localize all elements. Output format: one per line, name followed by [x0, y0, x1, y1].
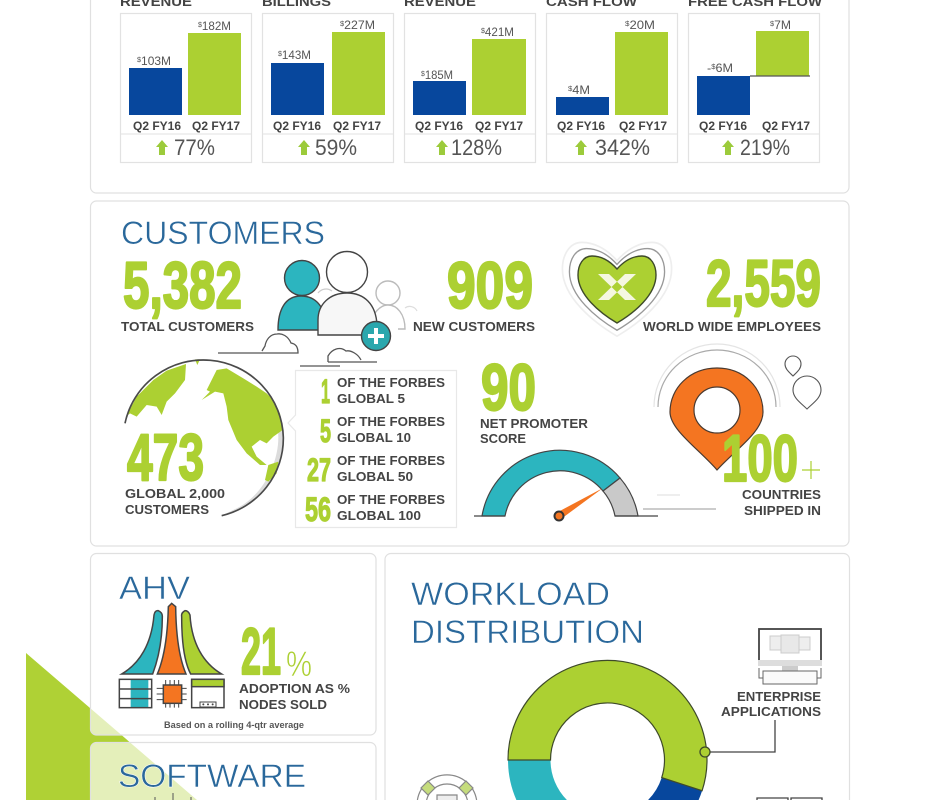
card: revenue: Q2 FY17 [192, 121, 240, 133]
heading: ahv: AHV [119, 570, 191, 606]
icon: monitor and server [758, 629, 822, 684]
note: rolling average: Based on a rolling 4-qtr average [164, 720, 304, 731]
panel: workload distribution [385, 554, 850, 800]
icon: globe: 473 [127, 420, 204, 494]
card: free cash flow: $ [770, 21, 774, 28]
card: revenue: $ [198, 22, 202, 29]
panel: forbes: OF THE FORBES [337, 375, 445, 390]
stat: adoption: NODES SOLD [239, 697, 327, 712]
panel: ahv [90, 554, 376, 735]
stat: new customers: NEW CUSTOMERS [413, 319, 535, 334]
panel: forbes: 56 [305, 491, 331, 529]
panel: forbes: 27 [307, 452, 331, 488]
stat: net promoter score: NET PROMOTER [480, 416, 589, 431]
icon: people with plus [278, 252, 417, 350]
stat: adoption: 21 [241, 614, 281, 688]
panel: forbes: OF THE FORBES [337, 492, 445, 507]
heading: customers: CUSTOMERS [121, 215, 325, 251]
card: deferred revenue [404, 0, 536, 162]
card: free cash flow: $ [711, 64, 716, 71]
card: operating cash flow: $ [625, 21, 630, 28]
stat: countries shipped in: SHIPPED IN [744, 503, 821, 518]
stat: new customers [413, 248, 535, 334]
card: free cash flow: - [707, 63, 711, 75]
card: operating cash flow: 20M [629, 20, 655, 32]
stat: net promoter score: 90 [481, 350, 536, 424]
card: operating cash flow: 4M [572, 85, 590, 97]
heading: workload distribution: DISTRIBUTION [411, 614, 644, 650]
card: free cash flow: 219% [740, 135, 790, 160]
card: revenue: $ [137, 57, 141, 64]
card: revenue: Q2 FY16 [133, 121, 181, 133]
panel: financials [90, 0, 849, 193]
panel: forbes: GLOBAL 10 [337, 430, 411, 445]
card: operating cash flow [546, 0, 678, 162]
card: free cash flow: Q2 FY16 [699, 121, 747, 133]
panel: forbes: GLOBAL 100 [337, 508, 421, 523]
card: operating cash flow: Q2 FY16 [557, 121, 605, 133]
panel: forbes: 1 [321, 373, 330, 411]
heading: workload distribution [411, 576, 644, 650]
card: operating cash flow: Q2 FY17 [619, 121, 667, 133]
green corner triangle [26, 653, 197, 800]
card: billings: 59% [315, 135, 357, 160]
chart: donut [508, 660, 707, 800]
card: operating cash flow: $ [568, 86, 572, 93]
stat: total customers: 5,382 [123, 248, 242, 322]
icon: globe: CUSTOMERS [125, 502, 209, 517]
card: billings: $ [340, 21, 344, 28]
card: billings: $ [278, 51, 282, 58]
stat: adoption: ADOPTION AS % [239, 681, 350, 696]
icon: lifebuoy [417, 775, 477, 800]
stat: total customers [121, 248, 254, 334]
label: enterprise applications: APPLICATIONS [721, 704, 821, 719]
stat: net promoter score [480, 350, 589, 446]
card: billings: Q2 FY16 [273, 121, 321, 133]
icon: heart logo [562, 242, 672, 336]
card: billings: 143M [282, 50, 311, 62]
panel: forbes: GLOBAL 5 [337, 391, 405, 406]
icon: globe: GLOBAL 2,000 [125, 486, 225, 501]
card: operating cash flow: 342% [595, 135, 650, 160]
stat: world wide employees: 2,559 [706, 246, 821, 320]
stat: new customers: 909 [447, 248, 533, 322]
card: billings [262, 0, 394, 162]
card: deferred revenue: $ [421, 71, 425, 78]
panel: forbes [288, 370, 456, 529]
chart: gauge [474, 450, 716, 520]
card: free cash flow [688, 0, 823, 162]
icon: location pin [654, 344, 821, 470]
stat: countries shipped in: COUNTRIES [742, 487, 821, 502]
stat: countries shipped in: 100 [722, 421, 798, 495]
stat: world wide employees: WORLD WIDE EMPLOYEES [643, 319, 821, 334]
card: billings: 227M [344, 20, 375, 32]
heading: software: SOFTWARE [118, 758, 306, 794]
panel: forbes: OF THE FORBES [337, 414, 445, 429]
card: revenue: 77% [174, 135, 215, 160]
stat: net promoter score: SCORE [480, 431, 526, 446]
icon: software top [155, 793, 191, 800]
panel: forbes: 5 [320, 413, 331, 449]
card: deferred revenue: 128% [451, 135, 502, 160]
stat: world wide employees [643, 246, 821, 334]
stat: adoption [239, 614, 350, 712]
card: free cash flow: 7M [774, 20, 791, 32]
panel: forbes: GLOBAL 50 [337, 469, 413, 484]
card: revenue: 103M [141, 56, 171, 68]
card: deferred revenue: 185M [425, 70, 453, 82]
icon: clouds [218, 334, 377, 366]
card: free cash flow: 6M [715, 63, 733, 75]
card: deferred revenue: Q2 FY17 [475, 121, 523, 133]
stat: adoption: % [286, 645, 312, 684]
panel: customers [90, 201, 849, 546]
connector: enterprise applications [700, 720, 775, 757]
icon: bottom right device [757, 798, 822, 800]
panel: software [90, 742, 376, 800]
panel: forbes: OF THE FORBES [337, 453, 445, 468]
label: enterprise applications [721, 689, 821, 719]
card: free cash flow: Q2 FY17 [762, 121, 810, 133]
card: billings: Q2 FY17 [333, 121, 381, 133]
card: deferred revenue: Q2 FY16 [415, 121, 463, 133]
card: revenue: 182M [202, 21, 231, 33]
icon: ahv fans [119, 603, 224, 708]
card: deferred revenue: 421M [485, 27, 514, 39]
card: deferred revenue: $ [481, 28, 485, 35]
label: enterprise applications: ENTERPRISE [737, 689, 821, 704]
heading: workload distribution: WORKLOAD [411, 576, 610, 612]
card: revenue [120, 0, 252, 162]
icon: globe [125, 359, 283, 517]
stat: total customers: TOTAL CUSTOMERS [121, 319, 254, 334]
